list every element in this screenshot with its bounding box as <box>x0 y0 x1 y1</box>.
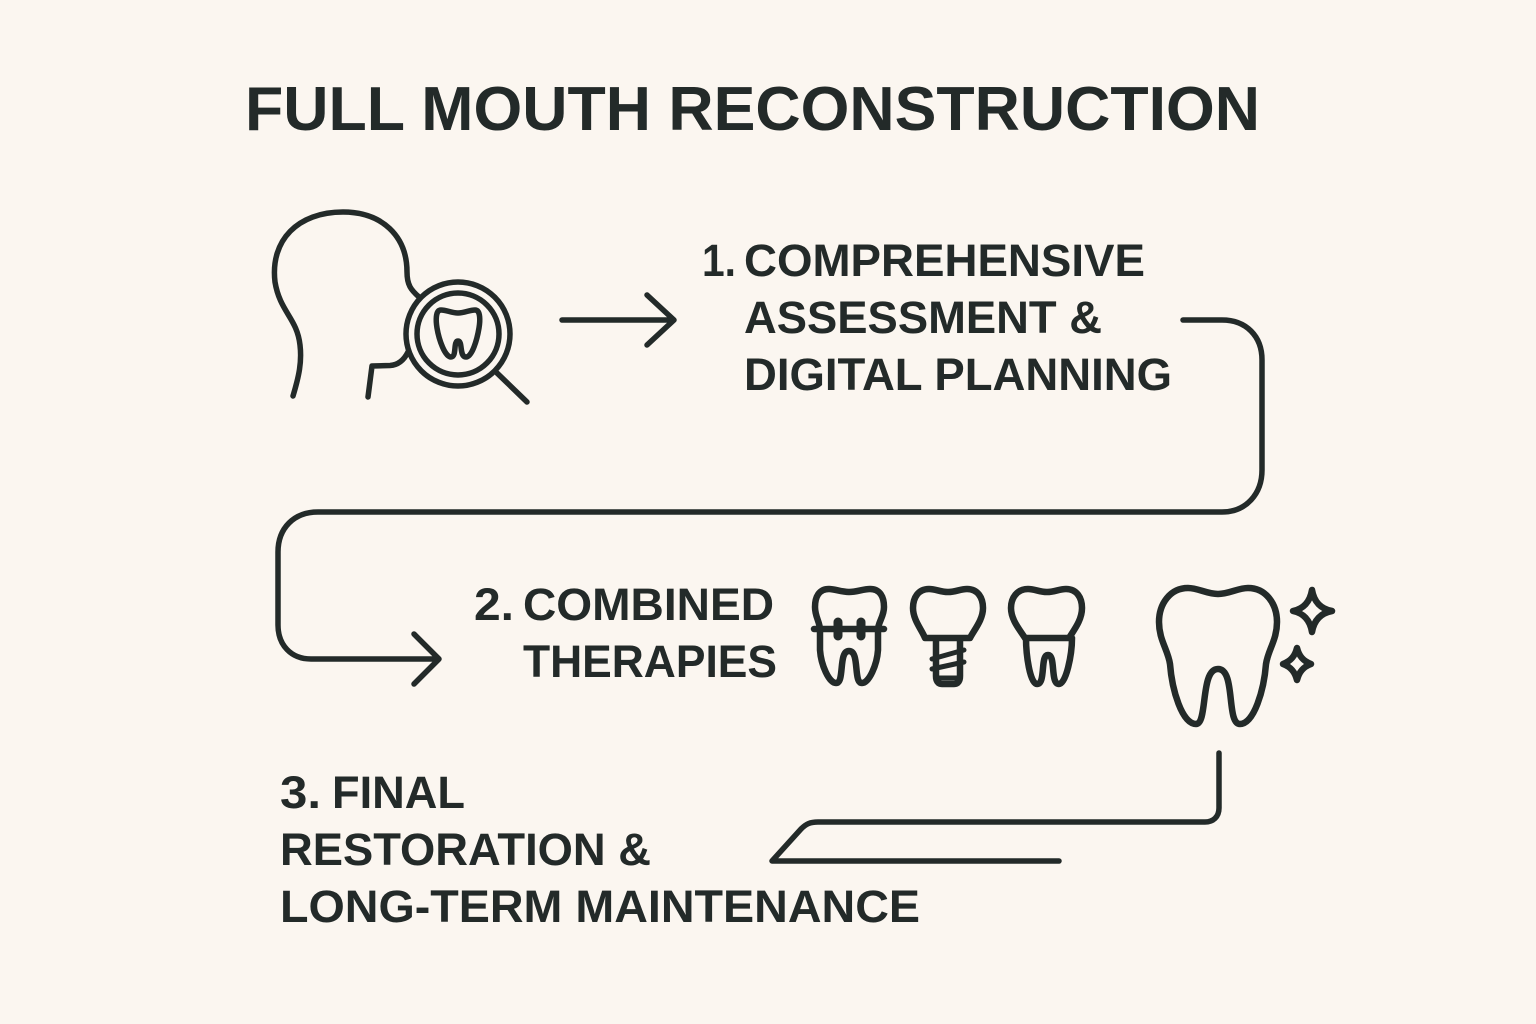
step 2 text <box>474 579 777 687</box>
step 3 text: FINAL <box>332 767 465 818</box>
arrow: connector from restored tooth to step 3 <box>772 753 1219 861</box>
title: FULL MOUTH RECONSTRUCTION <box>245 75 1260 144</box>
step 1 text: ASSESSMENT & <box>744 292 1102 343</box>
step 1 text: COMPREHENSIVE <box>744 235 1145 286</box>
step 3 text: LONG-TERM MAINTENANCE <box>280 881 920 932</box>
step 3 text <box>280 767 920 932</box>
icon: dental implant <box>913 589 983 684</box>
icon: tooth with braces <box>814 589 884 683</box>
step 3 text: 3. <box>280 767 321 818</box>
step 1 text <box>702 235 1172 400</box>
step 1 text: 1. <box>702 235 736 286</box>
icon: head profile with magnifier and tooth <box>274 212 527 402</box>
step 3 text: RESTORATION & <box>280 824 651 875</box>
icon: dental crown <box>1011 589 1082 684</box>
step 1 text: DIGITAL PLANNING <box>744 349 1172 400</box>
icon: restored tooth with sparkles <box>1159 588 1332 724</box>
step 2 text: 2. <box>474 579 514 630</box>
step 2 text: COMBINED <box>523 579 774 630</box>
arrow: to step 1 <box>562 295 674 345</box>
arrow: connector from step 1 to step 2 <box>278 320 1262 684</box>
step 2 text: THERAPIES <box>523 636 777 687</box>
